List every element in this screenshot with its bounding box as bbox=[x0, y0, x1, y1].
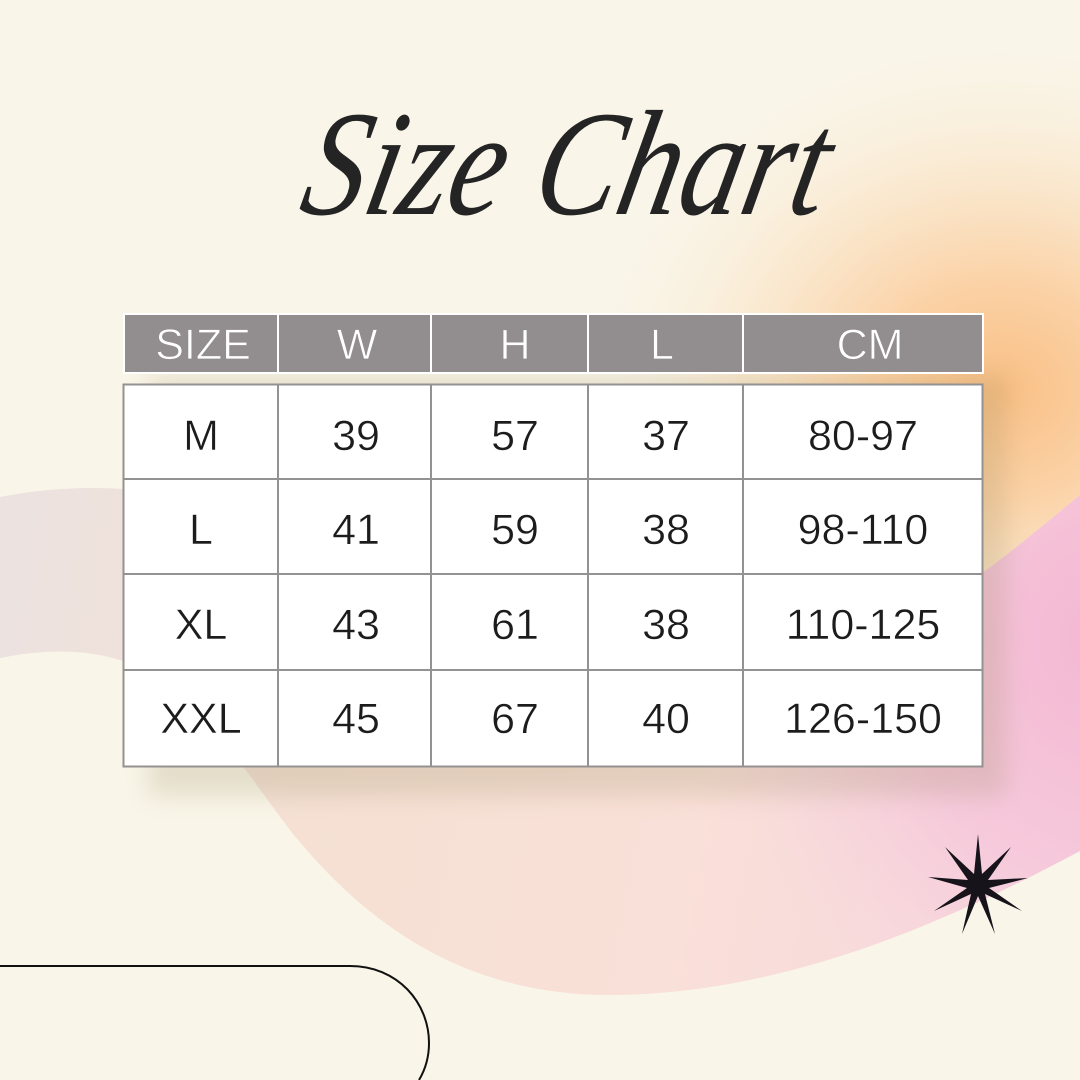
row XXL: 45 bbox=[332, 695, 380, 743]
row M: M bbox=[183, 412, 219, 460]
row XL: XL bbox=[175, 601, 227, 649]
table header: W bbox=[337, 321, 378, 369]
row XXL: 40 bbox=[642, 695, 690, 743]
table header: SIZE bbox=[155, 321, 251, 369]
row L: 98-110 bbox=[798, 506, 928, 554]
row XXL: XXL bbox=[160, 695, 242, 743]
title: Size Chart bbox=[290, 80, 851, 247]
pink wave band bbox=[0, 488, 1080, 995]
row XXL bbox=[160, 695, 942, 743]
row L bbox=[189, 506, 928, 554]
row M bbox=[183, 412, 918, 460]
table body bbox=[123, 384, 983, 767]
table header: H bbox=[499, 321, 531, 369]
row XL: 110-125 bbox=[786, 601, 940, 649]
row XL: 61 bbox=[491, 601, 539, 649]
row M: 37 bbox=[642, 412, 690, 460]
table header: CM bbox=[837, 321, 903, 369]
row L: 59 bbox=[491, 506, 539, 554]
row M: 80-97 bbox=[808, 412, 918, 460]
table header: L bbox=[650, 321, 674, 369]
row M: 57 bbox=[491, 412, 539, 460]
orange glow bbox=[580, 30, 1080, 750]
row XXL: 67 bbox=[491, 695, 539, 743]
row XL: 38 bbox=[642, 601, 690, 649]
row XXL: 126-150 bbox=[784, 695, 942, 743]
icon: star bbox=[928, 834, 1028, 934]
table header bbox=[123, 313, 984, 374]
row XL: 43 bbox=[332, 601, 380, 649]
outline rounded shape bbox=[0, 966, 429, 1080]
row L: 41 bbox=[332, 506, 380, 554]
row L: L bbox=[189, 506, 213, 554]
row L: 38 bbox=[642, 506, 690, 554]
row XL bbox=[175, 601, 940, 649]
table shadow bbox=[148, 376, 1006, 796]
row M: 39 bbox=[332, 412, 380, 460]
